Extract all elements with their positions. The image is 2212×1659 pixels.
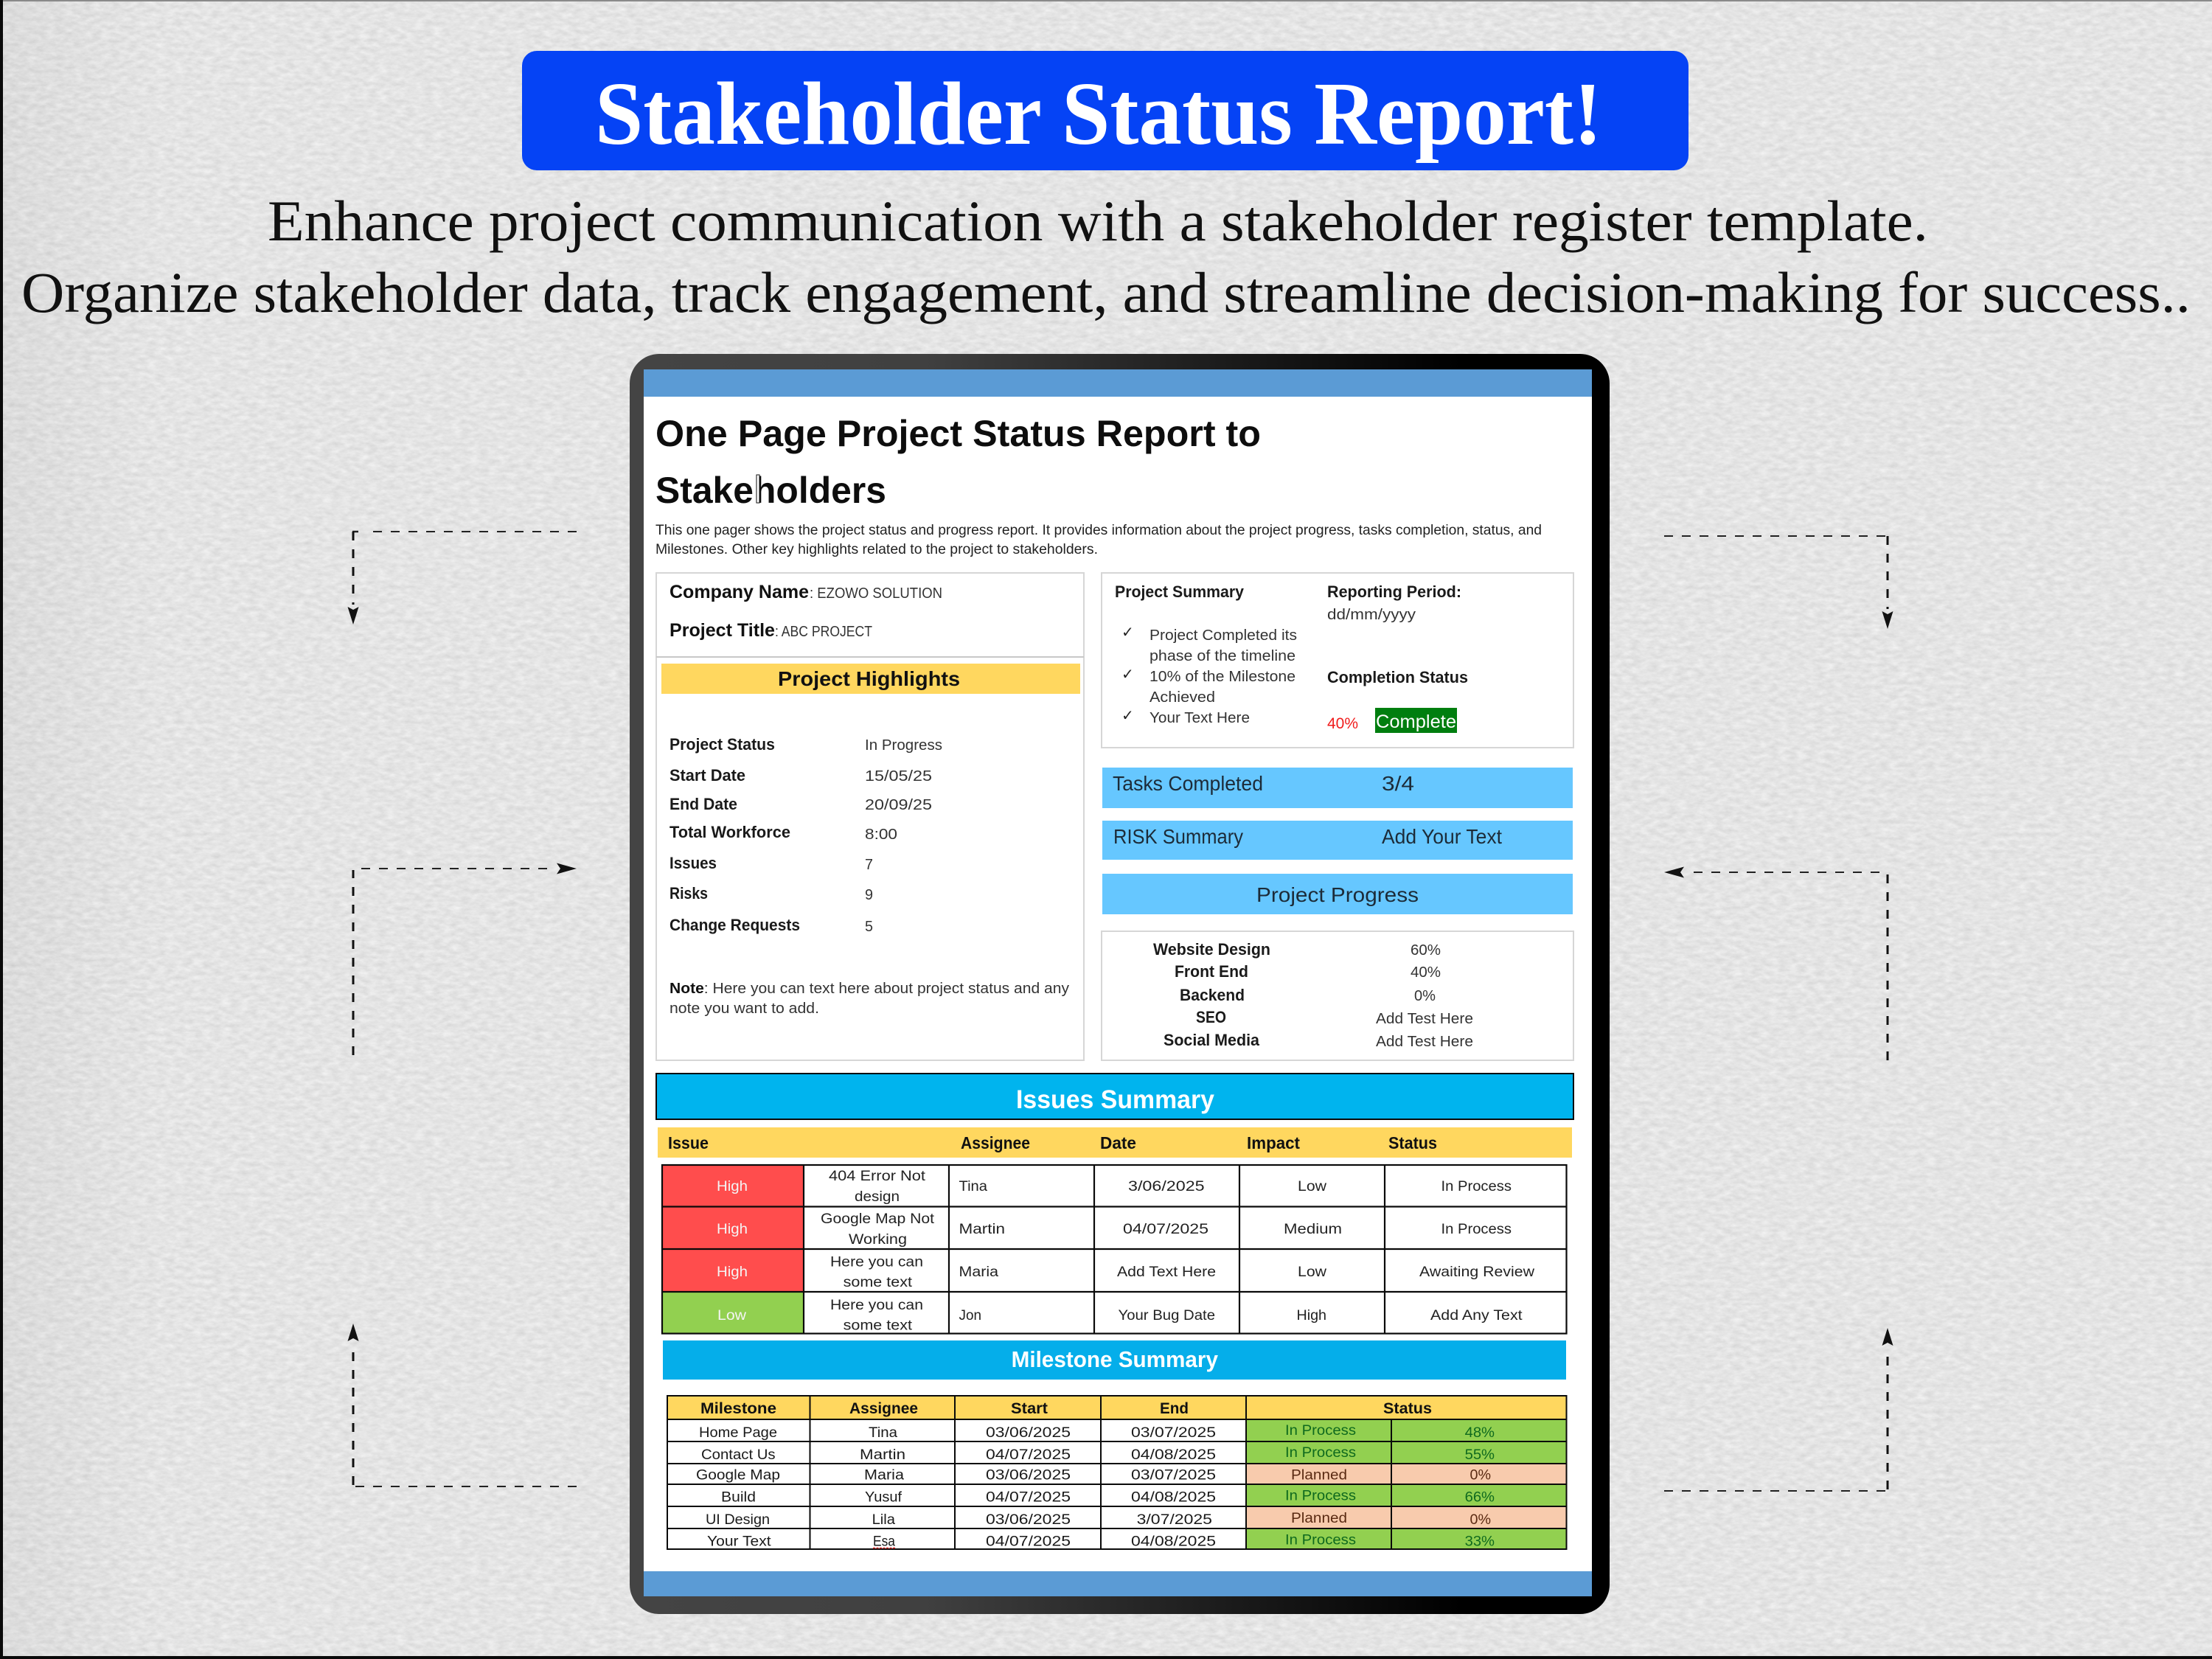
report heading: [655, 413, 1261, 511]
issues table: Low: [1298, 1265, 1326, 1280]
arrow: top right dashed connector: [1664, 536, 1893, 629]
project summary list: phase of the timeline: [1150, 648, 1295, 664]
arrow: top left dashed connector: [348, 532, 577, 625]
reporting period: Reporting Period:: [1327, 582, 1461, 601]
issues table: Add Text Here: [1117, 1265, 1216, 1280]
milestone table: Lila: [872, 1512, 895, 1528]
arrow: middle right dashed connector: [1664, 867, 1888, 1060]
bottom blue band: [644, 1571, 1592, 1596]
panel: project progress list: [1102, 931, 1573, 1060]
issues table: some text: [844, 1275, 913, 1290]
issues table: Google Map Not: [821, 1211, 935, 1227]
issues table header: [658, 1127, 1572, 1158]
panel: project progress list: Add Test Here: [1376, 1011, 1473, 1027]
arrow: bottom left dashed connector: [348, 1324, 577, 1486]
issues table: Low: [1298, 1179, 1326, 1194]
project highlights heading: Project Highlights: [778, 667, 960, 690]
panel: project progress list: Add Test Here: [1376, 1034, 1473, 1050]
issues table: design: [855, 1189, 900, 1205]
milestone table: Yusuf: [865, 1489, 902, 1506]
milestone table: Build: [721, 1489, 756, 1506]
issues table: High: [717, 1179, 748, 1194]
milestone table: Start: [1011, 1400, 1048, 1417]
highlights list: 15/05/25: [865, 768, 932, 785]
milestone table: Your Text: [707, 1534, 771, 1550]
subtitle text: Organize stakeholder data, track engagement, and streamline decision-making for success..: [21, 260, 2191, 324]
highlights list: 20/09/25: [865, 797, 932, 813]
highlights list: Start Date: [669, 766, 745, 785]
project summary list: ✓: [1121, 665, 1134, 683]
risk summary bar: Add Your Text: [1382, 825, 1502, 848]
panel: project progress list: Website Design: [1153, 940, 1270, 959]
note: [669, 981, 1069, 1017]
milestone table: Assignee: [849, 1400, 918, 1417]
milestone table: 48%: [1465, 1425, 1495, 1441]
milestone table: 3/07/2025: [1137, 1512, 1212, 1528]
issues table: Martin: [959, 1222, 1005, 1237]
milestone table: In Process: [1285, 1488, 1356, 1504]
issues table header: Assignee: [961, 1133, 1030, 1152]
issues table: Maria: [959, 1265, 998, 1280]
reporting period: dd/mm/yyyy: [1327, 607, 1416, 623]
milestone table: Milestone: [700, 1400, 776, 1417]
milestone table: 04/07/2025: [986, 1534, 1071, 1550]
panel: project progress list: Backend: [1180, 986, 1245, 1004]
panel: project highlights: [656, 573, 1084, 1060]
milestone summary heading: [663, 1340, 1566, 1380]
issues table: 404 Error Not: [829, 1169, 926, 1184]
panel: project summary: [1102, 573, 1573, 748]
reporting period: [1327, 582, 1461, 623]
milestone table: In Process: [1285, 1533, 1356, 1548]
milestone table: 0%: [1470, 1512, 1491, 1528]
issues table: High: [1296, 1308, 1326, 1324]
milestone table: 55%: [1465, 1447, 1495, 1463]
milestone table: In Process: [1285, 1423, 1356, 1439]
milestone table: Google Map: [696, 1468, 780, 1484]
project summary list: Project Completed its: [1150, 627, 1297, 644]
completion status: Completion Status: [1327, 668, 1468, 686]
project summary list: [1115, 582, 1297, 726]
note: Note: Here you can text here about project status and any: [669, 981, 1069, 997]
tablet device mockup: [630, 354, 1610, 1614]
issues table: In Process: [1441, 1179, 1512, 1194]
milestone table: Maria: [864, 1468, 904, 1484]
highlights list: 7: [865, 857, 873, 873]
issues summary heading: [656, 1074, 1573, 1119]
project highlights heading: [661, 664, 1080, 694]
milestone summary heading: Milestone Summary: [1012, 1346, 1219, 1372]
issues table: In Process: [1441, 1222, 1512, 1237]
milestone table: 04/07/2025: [986, 1489, 1071, 1506]
milestone table: Contact Us: [701, 1447, 776, 1463]
report description: Milestones. Other key highlights related to the project to stakeholders.: [655, 541, 1098, 557]
project title: : ABC PROJECT: [775, 624, 872, 640]
issues table: some text: [844, 1318, 913, 1334]
company name: Company Name: [669, 582, 809, 602]
issues table header: Status: [1388, 1133, 1437, 1152]
completion status: Complete: [1376, 712, 1456, 732]
milestone table: Home Page: [699, 1425, 777, 1441]
note: note you want to add.: [669, 1001, 819, 1017]
milestone table: 04/08/2025: [1131, 1489, 1216, 1506]
issues table: [662, 1165, 1566, 1334]
milestone table: [667, 1396, 1566, 1550]
milestone table: UI Design: [706, 1512, 770, 1528]
project summary list: 10% of the Milestone: [1150, 669, 1295, 685]
subtitle text: Enhance project communication with a stakeholder register template.: [268, 189, 1928, 253]
project progress bar: [1102, 874, 1573, 914]
subtitle text: [21, 189, 2191, 324]
panel: project progress list: Social Media: [1164, 1031, 1260, 1049]
project summary list: ✓: [1121, 623, 1134, 641]
issues table: High: [717, 1265, 748, 1280]
milestone table: End: [1160, 1400, 1189, 1417]
issues table: Add Any Text: [1430, 1308, 1523, 1324]
issues table: 04/07/2025: [1123, 1222, 1208, 1237]
completion status: 40%: [1327, 715, 1358, 732]
highlights list: In Progress: [865, 737, 942, 754]
issues table header: Issue: [668, 1133, 709, 1152]
milestone table: 03/07/2025: [1131, 1425, 1216, 1441]
milestone table: Planned: [1291, 1511, 1347, 1526]
project progress bar: Project Progress: [1256, 883, 1419, 906]
company name: : EZOWO SOLUTION: [810, 585, 942, 602]
milestone table: Tina: [869, 1425, 897, 1441]
milestone table: 0%: [1470, 1468, 1491, 1484]
risk summary bar: RISK Summary: [1113, 825, 1243, 848]
issues table: Tina: [959, 1179, 987, 1194]
tasks completed bar: [1102, 768, 1573, 808]
project title: Project Title: [669, 620, 775, 641]
issues table header: Date: [1100, 1133, 1136, 1152]
issues table header: Impact: [1247, 1133, 1300, 1152]
tasks completed bar: Tasks Completed: [1113, 772, 1263, 795]
arrow: middle left dashed connector: [353, 863, 577, 1055]
highlights list: [669, 735, 942, 935]
milestone table: 03/06/2025: [986, 1468, 1071, 1484]
completion status: [1327, 668, 1468, 733]
highlights list: Total Workforce: [669, 823, 790, 841]
issues table: Awaiting Review: [1419, 1265, 1534, 1280]
title banner: Stakeholder Status Report!: [595, 64, 1602, 164]
panel: project progress list: 40%: [1411, 964, 1441, 981]
issues table: Low: [717, 1308, 746, 1324]
company name: [669, 582, 942, 602]
project summary list: Achieved: [1150, 689, 1215, 706]
report description: [655, 522, 1542, 557]
issues table: Your Bug Date: [1118, 1308, 1215, 1324]
report description: This one pager shows the project status and progress report. It provides information about the project progress, tasks completion, status, and: [655, 522, 1542, 538]
issues table: Working: [849, 1232, 907, 1248]
milestone table: 04/07/2025: [986, 1447, 1071, 1463]
milestone table: 04/08/2025: [1131, 1447, 1216, 1463]
milestone table: Martin: [860, 1447, 905, 1463]
project summary list: ✓: [1121, 706, 1134, 724]
project title: [669, 620, 872, 641]
issues table: Medium: [1284, 1222, 1342, 1237]
highlights list: 9: [865, 887, 873, 903]
project summary list: Your Text Here: [1150, 710, 1250, 726]
milestone table: In Process: [1285, 1445, 1356, 1461]
milestone table: 04/08/2025: [1131, 1534, 1216, 1550]
milestone table: Status: [1383, 1400, 1432, 1417]
risk summary bar: [1102, 821, 1573, 860]
milestone table: 03/06/2025: [986, 1512, 1071, 1528]
highlights list: Issues: [669, 854, 717, 872]
arrow: bottom right dashed connector: [1664, 1328, 1893, 1491]
milestone table: Planned: [1291, 1468, 1347, 1484]
milestone table: 03/06/2025: [986, 1425, 1071, 1441]
highlights list: End Date: [669, 795, 737, 813]
issues table: Here you can: [830, 1298, 923, 1313]
panel: project progress list: Front End: [1175, 962, 1248, 981]
panel: project progress list: 60%: [1411, 942, 1441, 959]
panel: project progress list: 0%: [1414, 988, 1436, 1004]
report heading: Stakeholders: [655, 470, 886, 511]
report heading: One Page Project Status Report to: [655, 413, 1261, 454]
milestone table: 66%: [1465, 1489, 1495, 1506]
highlights list: Risks: [669, 884, 708, 902]
top blue band: [644, 369, 1592, 397]
issues table: Here you can: [830, 1255, 923, 1270]
milestone table: Esa: [873, 1534, 895, 1550]
highlights list: 8:00: [865, 827, 897, 843]
tasks completed bar: 3/4: [1382, 772, 1414, 795]
panel: project progress list: SEO: [1196, 1008, 1226, 1026]
milestone table: 33%: [1465, 1534, 1495, 1550]
milestone table: 03/07/2025: [1131, 1468, 1216, 1484]
highlights list: Change Requests: [669, 916, 800, 934]
issues summary heading: Issues Summary: [1016, 1085, 1215, 1114]
project summary list: Project Summary: [1115, 582, 1245, 601]
highlights list: 5: [865, 919, 873, 935]
issues table: Jon: [959, 1308, 981, 1324]
issues table: High: [717, 1222, 748, 1237]
issues table: 3/06/2025: [1128, 1179, 1205, 1194]
highlights list: Project Status: [669, 735, 775, 754]
